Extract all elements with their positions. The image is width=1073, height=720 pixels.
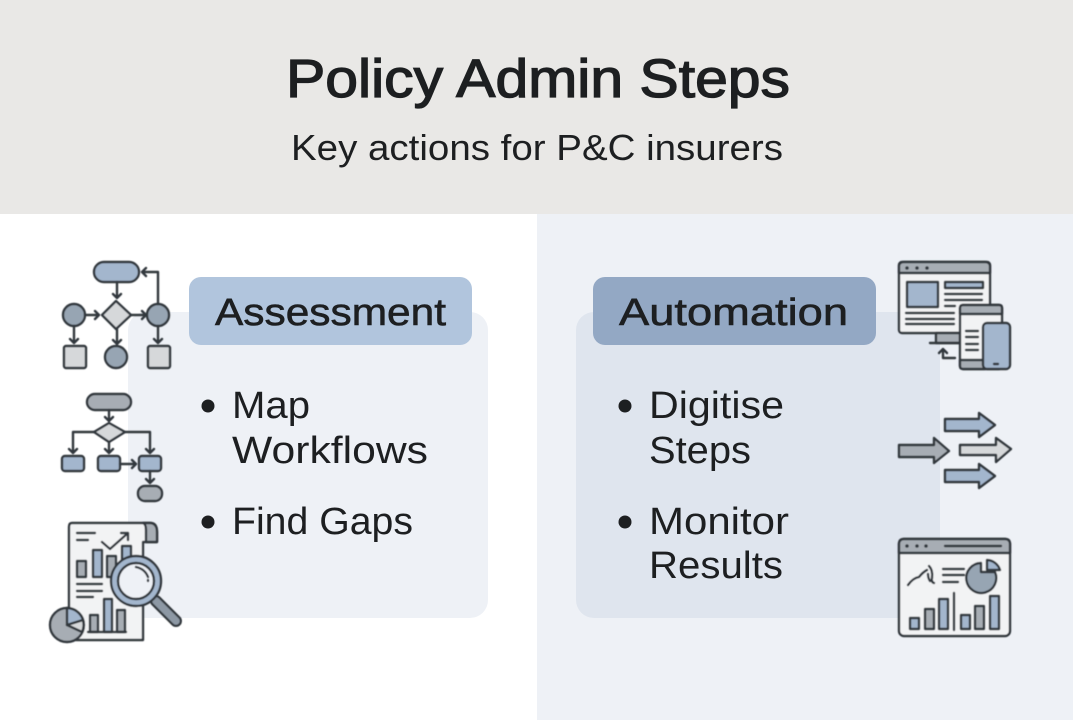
assessment heading: Assessment bbox=[215, 292, 446, 334]
icon: devices bbox=[899, 262, 1010, 369]
automation bullets: Results bbox=[649, 545, 783, 587]
icon: decision flowchart bbox=[62, 394, 162, 501]
icon: arrows bbox=[899, 413, 1011, 488]
automation bullets: Digitise bbox=[649, 385, 784, 427]
automation bullets: Monitor bbox=[649, 501, 789, 543]
automation bullets: Steps bbox=[649, 430, 751, 472]
automation heading pill bbox=[593, 277, 876, 345]
assessment bullets bbox=[202, 385, 428, 543]
automation card bbox=[576, 312, 940, 618]
assessment bullets: Map bbox=[232, 385, 310, 427]
icon: process flowchart bbox=[63, 262, 170, 368]
panel: right background bbox=[537, 214, 1073, 720]
header band bbox=[0, 0, 1073, 214]
automation bullets bbox=[618, 385, 789, 587]
icon: dashboard bbox=[899, 539, 1010, 636]
automation heading: Automation bbox=[619, 292, 848, 334]
panel: automation bbox=[576, 277, 940, 618]
assessment heading pill bbox=[189, 277, 472, 345]
subtitle: Key actions for P&C insurers bbox=[291, 127, 783, 168]
assessment bullets: Workflows bbox=[232, 430, 428, 472]
assessment card bbox=[128, 312, 488, 618]
icon: report with magnifier bbox=[50, 523, 176, 642]
panel: assessment bbox=[128, 277, 488, 618]
assessment bullets: Find Gaps bbox=[232, 501, 413, 543]
title: Policy Admin Steps bbox=[286, 49, 790, 109]
